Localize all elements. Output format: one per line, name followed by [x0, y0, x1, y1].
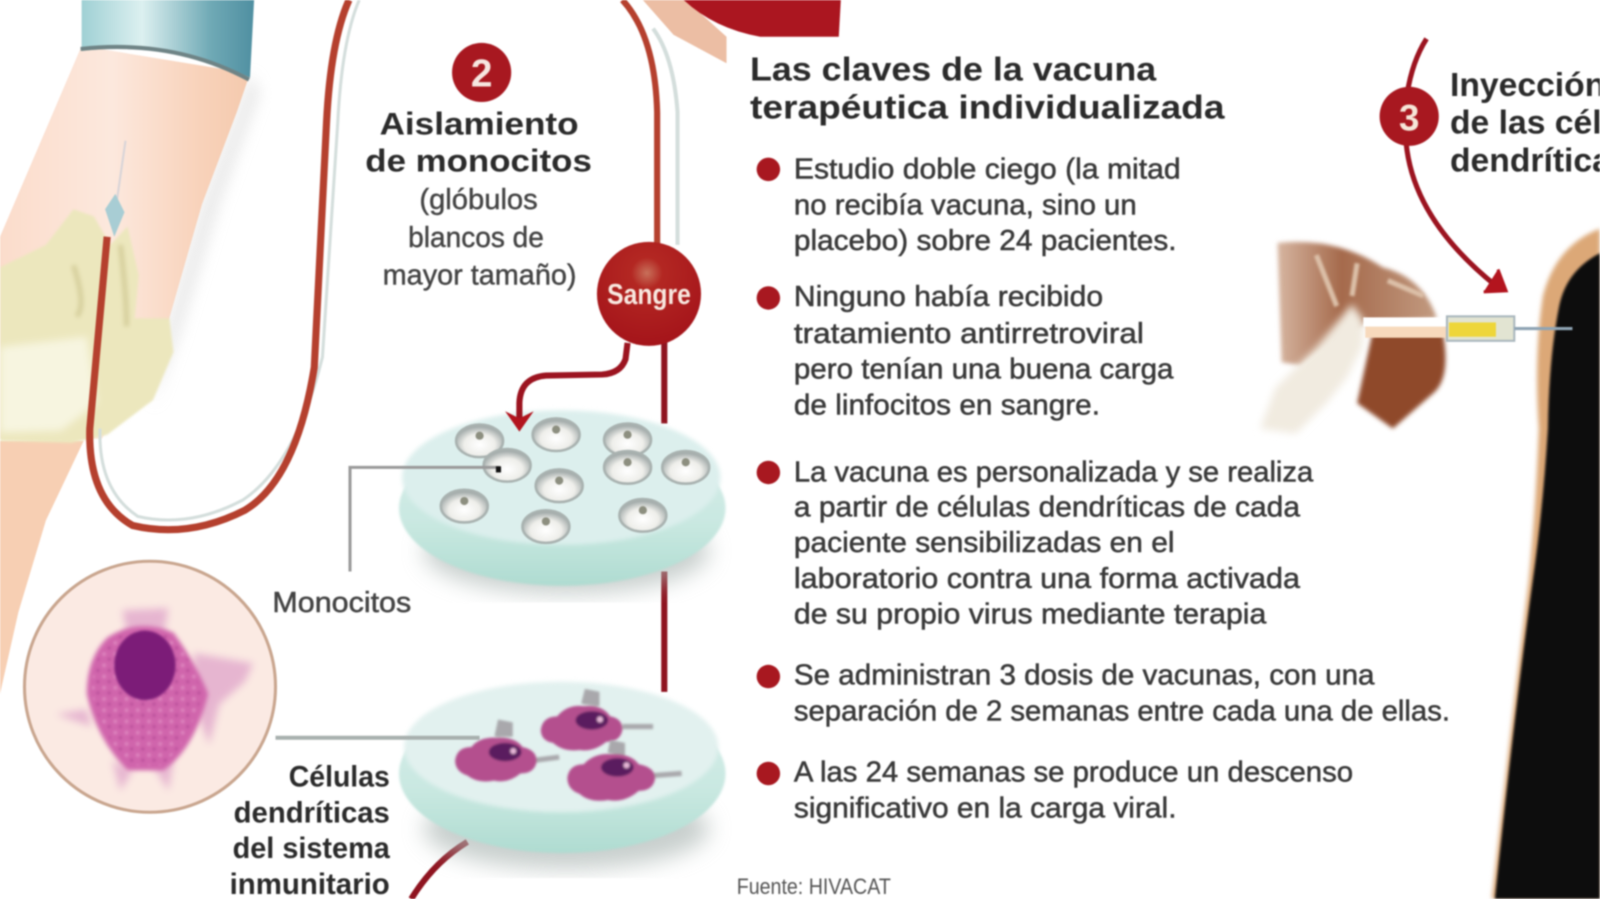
glove: [1260, 304, 1364, 434]
dendritic cells label: dendríticas: [234, 796, 390, 829]
key point 3: paciente sensibilizadas en el: [794, 527, 1174, 559]
monocyte nuclei: [460, 426, 690, 526]
arm illustration: [0, 0, 260, 694]
monocytes: [441, 418, 709, 543]
key point 4: [757, 660, 1450, 727]
key point 2: tratamiento antirretroviral: [794, 318, 1144, 350]
key point 5: significativo en la carga viral.: [794, 792, 1177, 824]
skin corner: [643, 0, 727, 63]
patient body: [1492, 229, 1600, 899]
key point 5: [757, 757, 1353, 824]
key point 2: de linfocitos en sangre.: [794, 389, 1100, 421]
step 1 corner shape: [643, 0, 841, 63]
forearm skin: [0, 46, 250, 439]
step 2 heading: [365, 106, 592, 178]
cell body: [87, 626, 208, 770]
key point 1: no recibía vacuna, sino un: [794, 189, 1137, 221]
gloved hand: [0, 209, 173, 443]
key point 1: Estudio doble ciego (la mitad: [794, 154, 1181, 186]
step 2 description: blancos de: [408, 222, 544, 254]
blood ball: [597, 242, 701, 346]
dendritic cells label: del sistema: [233, 832, 390, 865]
glove finger shading: [73, 245, 127, 327]
dendritic cells label: Células: [289, 761, 390, 794]
step 2 description: mayor tamaño): [383, 260, 577, 292]
arrow to petri dish: [505, 343, 628, 432]
blood ball: Sangre: [607, 279, 691, 311]
leader from cell circle: [276, 736, 480, 740]
key point 1: placebo) sobre 24 pacientes.: [794, 225, 1177, 257]
magnified dendritic cell: [24, 561, 276, 812]
upper hand: [1278, 242, 1437, 365]
key point 3: La vacuna es personalizada y se realiza: [794, 457, 1313, 489]
hand with syringe: [1260, 242, 1572, 434]
tube right side: [622, 0, 657, 245]
skin edge: [1492, 229, 1600, 899]
dendritic cell: [455, 722, 559, 781]
tube outer pale line: [100, 0, 359, 520]
step 3 badge: 3: [1399, 98, 1419, 139]
needle: [116, 141, 126, 204]
step 3 heading: [1450, 67, 1600, 179]
main title: [750, 52, 1225, 126]
key point 4: separación de 2 semanas entre cada una de ellas.: [794, 695, 1450, 727]
tube left side: [90, 0, 349, 530]
blood tube loop: [90, 0, 678, 530]
key point 4: Se administran 3 dosis de vacunas, con una: [794, 660, 1375, 692]
main title: terapéutica individualizada: [750, 89, 1225, 126]
key point 3: de su propio virus mediante terapia: [794, 598, 1266, 630]
main title: Las claves de la vacuna: [750, 52, 1156, 89]
step 3 badge: [1380, 87, 1439, 146]
key point 2: [757, 281, 1174, 421]
step 2 badge: 2: [471, 53, 492, 96]
lower hand: [1357, 333, 1445, 429]
black garment: [1495, 253, 1600, 899]
petri dish with monocytes: [399, 410, 726, 594]
source: Fuente: HIVACAT: [737, 874, 891, 899]
circle frame: [24, 561, 276, 812]
monocitos leader and label: [272, 466, 501, 619]
cell granules: [92, 631, 202, 765]
arm soft shadow: [153, 73, 260, 408]
step 3 arrow: [1406, 39, 1506, 292]
plunger: [1363, 317, 1449, 327]
step 2 badge: [452, 43, 511, 102]
needle: [1514, 327, 1572, 330]
key point 1: [757, 154, 1181, 257]
monocitos leader and label: Monocitos: [272, 587, 411, 619]
dish shadow: [423, 508, 709, 594]
key point 2: pero tenían una buena carga: [794, 354, 1174, 386]
tube right pale line: [653, 29, 678, 245]
dish body: [399, 694, 726, 853]
dendritic cell: [567, 743, 682, 801]
connector ball to dish: [661, 342, 667, 423]
cell nucleus: [114, 631, 176, 700]
step 2 description: (glóbulos: [419, 184, 538, 216]
syringe body: [1447, 316, 1514, 341]
syringe barrel: [1365, 327, 1449, 338]
connector between dishes: [661, 571, 667, 692]
needle hub: [105, 194, 124, 237]
dish top: [404, 682, 718, 812]
hand creases: [1316, 255, 1423, 306]
sleeve edge: [81, 47, 249, 80]
dish top: [402, 410, 720, 545]
petri dish with dendritic cells: [399, 682, 726, 869]
dendritic cell: [541, 692, 653, 750]
key point 3: laboratorio contra una forma activada: [794, 563, 1300, 595]
red corner: [684, 0, 841, 37]
blood connectors: [411, 342, 664, 899]
key point 5: A las 24 semanas se produce un descenso: [794, 757, 1353, 789]
lower arm skin: [0, 441, 84, 694]
dish body: [399, 431, 726, 586]
key point 3: a partir de células dendríticas de cada: [794, 491, 1300, 523]
step 2 heading: Aislamiento: [380, 106, 579, 142]
key point 2: Ninguno había recibido: [794, 281, 1103, 313]
serum: [1449, 322, 1496, 337]
step 2 description: [383, 184, 577, 292]
key point 3: [757, 457, 1313, 630]
cell extensions: [56, 608, 253, 791]
sleeve band: [82, 0, 254, 78]
dish shadow: [423, 788, 709, 869]
step 2 heading: de monocitos: [365, 142, 592, 178]
dendritic cells label: [230, 761, 390, 899]
glove highlight: [0, 337, 97, 433]
connector bottom: [411, 842, 467, 899]
